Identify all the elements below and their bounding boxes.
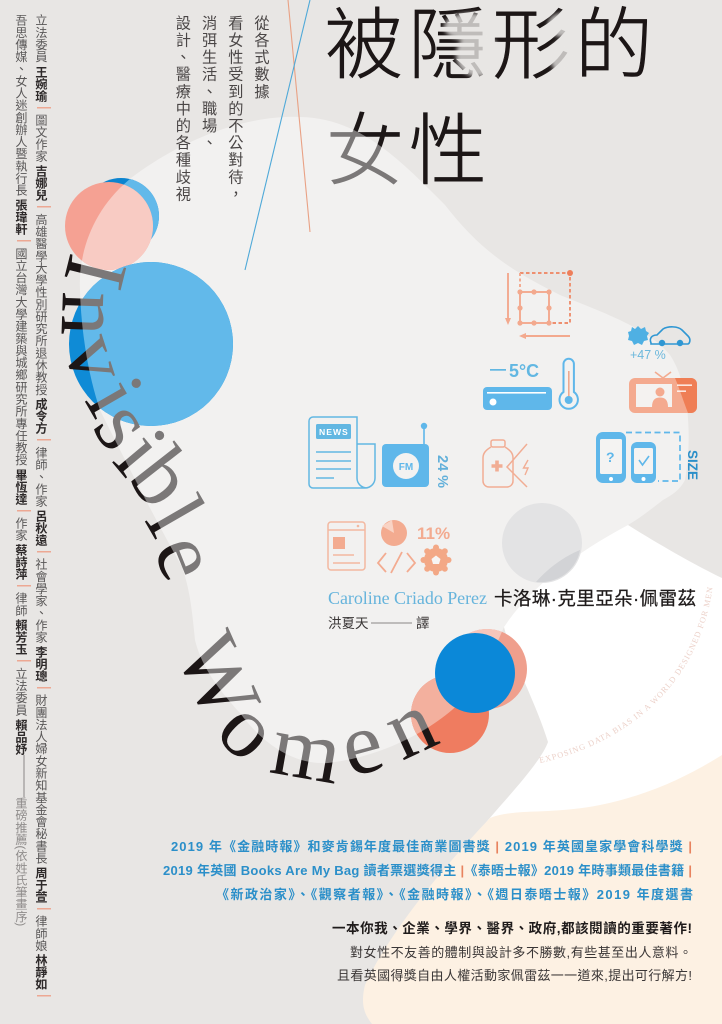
icon: thermometer — [560, 359, 578, 409]
award list: 《新政治家》、《觀察者報》、《金融時報》、《週日泰晤士報》2019 年度選書 — [216, 887, 693, 902]
icon: code brackets — [378, 552, 415, 573]
translator: 譯 — [416, 616, 430, 631]
icon: newspaper — [309, 417, 375, 488]
icon: web page — [328, 522, 365, 570]
background shape: white area — [480, 525, 722, 830]
blurb — [337, 945, 692, 983]
icon: phones with size: SIZE — [685, 450, 700, 480]
bottom circles — [411, 629, 527, 753]
tagline: bold: 一本你我、企業、學界、醫界、政府,都該閱讀的重要著作! — [332, 920, 692, 936]
subtitle: 看女性受到的不公對待， — [226, 15, 243, 203]
curved English title: Invisible Women: Women — [157, 619, 450, 804]
icon: sun and car — [628, 326, 690, 362]
translator — [328, 616, 430, 631]
recommenders: left column: 吾思傳媒、女人迷創辦人暨執行長 張瑋軒 國立台灣大學建築與城鄉研究所專任教授 畢恆達 作家 蔡詩萍 律師 賴芳玉 立法委員 賴品妤 重磅推薦(依姓氏筆畫序) — [14, 14, 28, 926]
curved tagline: EXPOSING DATA BIAS IN A WORLD DESIGNED FOR MEN — [539, 587, 712, 763]
award list: 2019 年英國 Books Are My Bag 讀者票選獎得主 |《泰晤士報》2019 年時事類最佳書籍 | — [163, 863, 692, 878]
icon: air conditioner -5°C — [483, 361, 552, 410]
icon: pie chart — [381, 520, 407, 546]
award list — [163, 839, 693, 902]
recommenders: right column: 立法委員 王婉瑜 圖文作家 吉娜兒 高雄醫學大學性別研究所退休教授 成令方 律師、作家 呂秋遠 社會學家、作家 李明璁 財團法人婦女新知基金會秘書長 周于萱 律師娘 林靜如 — [34, 14, 48, 990]
subtitle: 消弭生活、職場、 — [200, 15, 217, 152]
decorative thin lines — [245, 0, 310, 270]
label: 24 %: 24 % — [434, 455, 450, 488]
title: 女性: 女性 — [326, 107, 492, 195]
icon: newspaper: NEWS — [319, 427, 349, 437]
background shape: light blob — [80, 117, 689, 763]
top circles — [65, 178, 233, 426]
icon: phones with size: ? — [606, 449, 615, 465]
curved English title: Invisible Women: Invisible — [41, 246, 239, 593]
icon: medicine bottle and lightning — [483, 440, 528, 487]
subtitle: 設計、醫療中的各種歧視 — [173, 15, 190, 203]
author names: 卡洛琳·克里亞朵·佩雷茲 — [494, 588, 696, 609]
title smudge effect — [444, 13, 576, 77]
blurb: 且看英國得獎自由人權活動家佩雷茲一一道來,提出可行解方! — [337, 968, 692, 983]
icon: sun and car: +47 % — [630, 348, 666, 362]
author names: Caroline Criado Perez — [328, 588, 487, 608]
icon: FM radio — [382, 423, 429, 487]
author names — [328, 588, 696, 609]
icon: FM radio: FM — [399, 462, 413, 473]
icon: resize square — [505, 270, 573, 339]
icon: air conditioner -5°C: 5°C — [509, 361, 539, 381]
icon: phones with size — [596, 432, 700, 483]
title: 被隱形的: 被隱形的 — [325, 1, 653, 89]
curved English title: Invisible Women — [41, 246, 450, 804]
icon: gear — [420, 544, 452, 576]
label: 11%: 11% — [417, 524, 450, 543]
icon: television — [629, 372, 697, 413]
award list: 2019 年《金融時報》和麥肯錫年度最佳商業圖書獎 | 2019 年英國皇家學會科學獎 | — [171, 839, 692, 854]
blurb: 對女性不友善的體制與設計多不勝數,有些甚至出人意料。 — [350, 945, 692, 960]
subtitle — [173, 15, 270, 203]
subtitle: 從各式數據 — [252, 15, 269, 100]
background shape: peach area — [363, 755, 722, 1024]
translator: 洪夏天 — [328, 616, 369, 631]
grey circle — [502, 503, 582, 583]
